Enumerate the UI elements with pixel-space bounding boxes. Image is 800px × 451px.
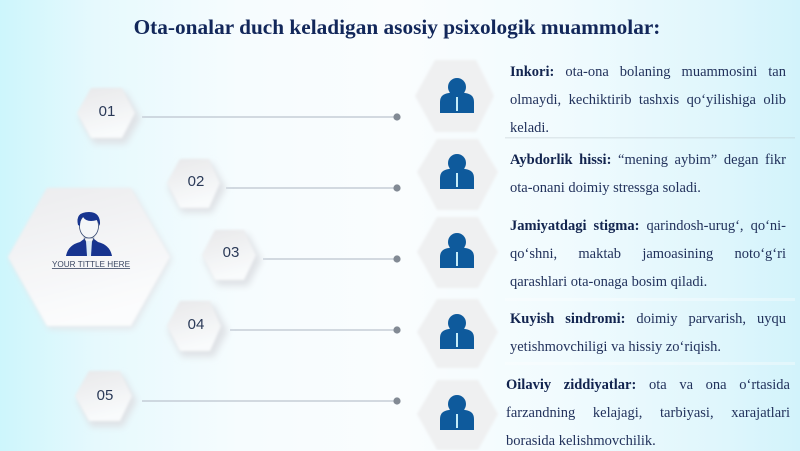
text: keladi.: [510, 120, 549, 136]
icon: central person: [66, 212, 112, 256]
text: Kuyish sindromi: doimiy parvarish, uyqu: [510, 311, 786, 327]
icon hexagon 2: [417, 139, 498, 210]
number hexagon 01: 01: [99, 103, 115, 120]
text: olmaydi, kechiktirib tashxis qo‘yilishiga olib: [510, 92, 786, 108]
icon hexagon 1: [415, 60, 494, 132]
text: Aybdorlik hissi: “mening aybim” degan fikr: [510, 152, 786, 168]
text block: Jamiyatdagi stigma: [510, 218, 786, 290]
title: Ota-onalar duch keladigan asosiy psixologik muammolar:: [134, 15, 660, 39]
text: yetishmovchiligi va hissiy zo‘riqish.: [510, 339, 721, 355]
number hexagon 04: 04: [188, 316, 204, 333]
text: Jamiyatdagi stigma: qarindosh-urug‘, qo‘ni-: [510, 218, 786, 234]
text block: Oilaviy ziddiyatlar: [506, 377, 790, 449]
number hexagon 01: [77, 88, 141, 144]
icon hexagon 3: [417, 217, 498, 288]
connector lines: [142, 113, 401, 405]
text: qo‘shni, maktab jamoasining noto‘g‘ri: [510, 246, 786, 262]
icon hexagon 5: [417, 380, 498, 450]
text block: Inkori: [510, 64, 786, 136]
number hexagon 04: [167, 301, 228, 357]
text block: Aybdorlik hissi: [510, 152, 786, 196]
number hexagon 03: 03: [223, 244, 239, 261]
number hexagon 02: 02: [188, 173, 204, 190]
text: qarashlari ota-onaga bosim qiladi.: [510, 274, 707, 290]
text block: Kuyish sindromi: [510, 311, 786, 355]
central hexagon caption: YOUR TITTLE HERE: [52, 260, 131, 269]
text: borasida kelishmovchilik.: [506, 433, 656, 449]
number hexagon 02: [167, 159, 226, 213]
decorative text bands: [505, 137, 795, 365]
text: Oilaviy ziddiyatlar: ota va ona o‘rtasida: [506, 377, 790, 393]
text: Inkori: ota-ona bolaning muammosini tan: [510, 64, 786, 80]
number hexagon 05: [75, 371, 137, 427]
panel: central hexagon: [8, 188, 172, 329]
text: farzandning kelajagi, tarbiyasi, xarajatlari: [506, 405, 790, 421]
text: ota-onani doimiy stressga soladi.: [510, 180, 701, 196]
number hexagon 05: 05: [97, 387, 113, 404]
icon hexagon 4: [417, 299, 498, 368]
number hexagon 03: [202, 230, 262, 286]
